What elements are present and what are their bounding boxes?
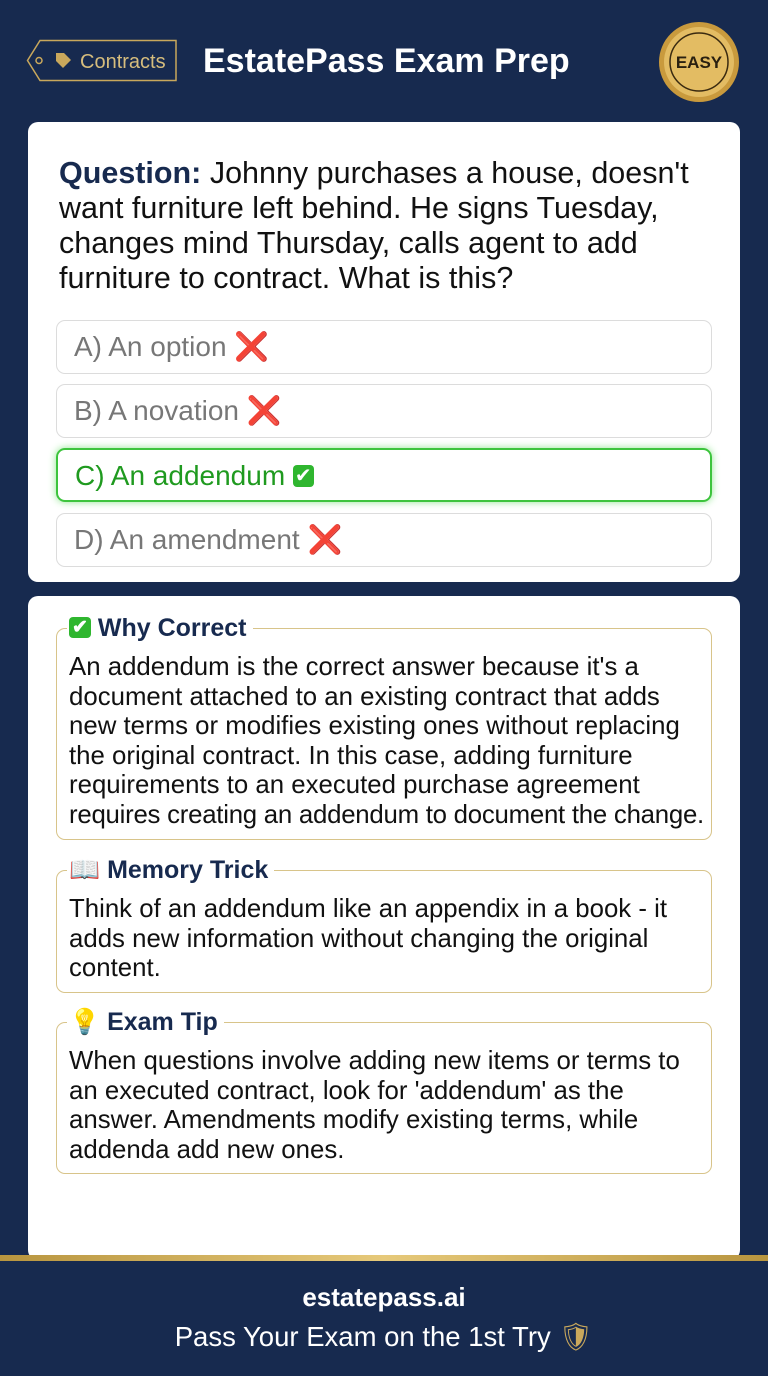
box: why correct: ✔ Why Correct (72, 614, 247, 642)
option B: B) A novation ❌ (74, 395, 282, 426)
box: exam tip: 💡 Exam Tip (69, 1008, 218, 1036)
box: memory trick: 📖 Memory Trick (69, 856, 268, 884)
panel: explanation (28, 596, 740, 1260)
question text: Question: Johnny purchases a house, doesn't want furniture left behind. He signs Tuesday, changes mind Thursday, calls agent to add furniture to contract. What is this? (59, 156, 689, 295)
box: exam tip: addenda add new ones. (69, 1136, 344, 1164)
box: why correct: the original contract. In this case, adding furniture (69, 742, 633, 770)
badge: EASY (659, 22, 739, 102)
box: why correct: document attached to an existing contract that adds (69, 682, 660, 710)
box: why correct: requirements to an executed purchase agreement (69, 771, 640, 799)
option D (56, 513, 712, 567)
box: exam tip: answer. Amendments modify existing terms, while (69, 1106, 638, 1134)
option D: D) An amendment ❌ (74, 524, 342, 555)
option C correct (56, 448, 712, 502)
badge: EASY: EASY (676, 53, 723, 72)
box: why correct: An addendum is the correct answer because it's a (69, 653, 639, 681)
box: memory trick: content. (69, 954, 161, 982)
box: exam tip (56, 1022, 712, 1174)
header: category tag (26, 40, 177, 82)
footer: tagline: Pass Your Exam on the 1st Try 🛡 (175, 1321, 593, 1352)
box: why correct (56, 628, 712, 840)
option B (56, 384, 712, 438)
header: category tag: Contracts (80, 51, 166, 73)
panel: question (28, 122, 740, 582)
footer: site: estatepass.ai (302, 1282, 466, 1312)
box: why correct: new terms or modifies existing ones without replacing (69, 712, 680, 740)
box: why correct: requires creating an addendum to document the change. (69, 800, 704, 828)
box: memory trick: Think of an addendum like an appendix in a book - it (69, 895, 667, 923)
box: memory trick: adds new information without changing the original (69, 924, 648, 952)
option C correct: C) An addendum ✔ (75, 460, 312, 491)
box: exam tip: When questions involve adding new items or terms to (69, 1047, 680, 1075)
title: EstatePass Exam Prep (203, 42, 570, 80)
box: memory trick (56, 870, 712, 993)
option A: A) An option ❌ (74, 331, 269, 362)
box: exam tip: an executed contract, look for 'addendum' as the (69, 1076, 624, 1104)
gold divider (0, 1255, 768, 1261)
option A (56, 320, 712, 374)
